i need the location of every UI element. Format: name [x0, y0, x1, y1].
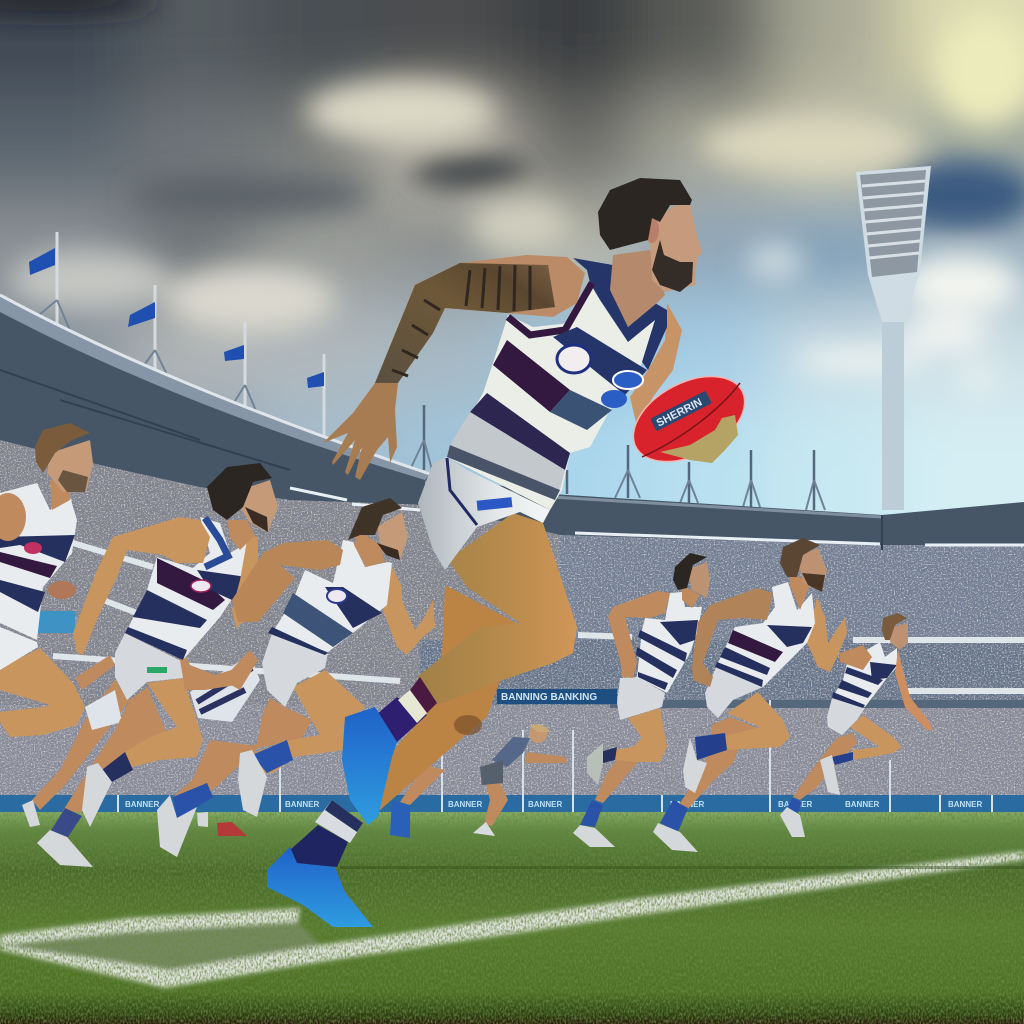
main player [267, 178, 759, 927]
main player face [650, 203, 702, 292]
main player sock maroon band [410, 677, 437, 713]
main player shorts [418, 457, 550, 570]
second runner shorts tag [147, 667, 167, 673]
far left runner beard [58, 470, 88, 492]
second runner far arm [232, 535, 258, 628]
main player maroon hoop [493, 340, 570, 412]
main player rear leg bruise [454, 715, 482, 735]
right runner three arm [840, 645, 872, 670]
perimeter advertising boards: BANNER [778, 800, 812, 809]
stadium roof [0, 295, 1024, 550]
perimeter advertising boards: BANNER [448, 800, 482, 809]
second runner lower hoops [125, 590, 207, 660]
right runner one face [687, 562, 710, 598]
right runner two arm [692, 588, 773, 687]
right runner one lower boot [573, 825, 615, 847]
main player chest hoop [553, 327, 647, 395]
third runner chest hoop [325, 587, 382, 628]
second runner raised boot [82, 763, 112, 827]
main player crest [557, 345, 591, 373]
second runner lower boot [37, 830, 93, 867]
third runner face [377, 512, 408, 560]
far left runner neck [50, 480, 70, 510]
far left runner face [47, 440, 93, 492]
second runner rear arm [180, 625, 238, 690]
far left runner hoops [0, 535, 75, 612]
right runner two jersey [717, 582, 815, 687]
football [619, 359, 759, 479]
right runner three far arm [895, 650, 933, 730]
right runner two raised sock [695, 733, 727, 760]
perimeter advertising boards: BANNER [845, 800, 879, 809]
floodlight tower [856, 166, 931, 510]
right runner two far arm [807, 597, 847, 672]
far left runner hair [35, 423, 90, 473]
main player hair [598, 178, 692, 250]
third runner hair [348, 498, 402, 540]
right runner two beard [802, 573, 825, 592]
second runner maroon hoop [157, 558, 225, 610]
right runner one hoops [636, 620, 698, 690]
third runner jersey [272, 540, 392, 652]
jersey badge two [601, 390, 627, 408]
main player shorts trim [447, 458, 477, 525]
jersey badge one [613, 371, 643, 389]
second runner beard [245, 507, 268, 532]
grass texture [0, 812, 1024, 1024]
third runner arm [232, 540, 343, 622]
right runner two thigh [722, 692, 790, 750]
main player rear band stripe [325, 800, 363, 832]
player: far left runner [0, 423, 93, 737]
right runner three hoops [832, 662, 897, 708]
main player rear sock [290, 825, 348, 867]
perimeter advertising boards: BANNER [285, 800, 319, 809]
third runner lower hoop [268, 627, 328, 655]
far left runner badge [24, 542, 42, 554]
player: second runner [37, 463, 278, 867]
background player: legs behind main runner [390, 765, 445, 838]
main player raised boot [342, 707, 397, 825]
second runner collar [205, 518, 228, 567]
third runner raised boot [238, 750, 267, 817]
right runner two lower sock [660, 800, 688, 832]
far left runner shoulder [0, 493, 26, 541]
third runner mid hoop [283, 593, 353, 647]
main player raised sock [370, 697, 427, 742]
third runner front leg [255, 670, 365, 775]
third runner lower sock [173, 783, 213, 820]
right runner one lower leg [595, 760, 638, 803]
storm clouds [0, 0, 1024, 387]
second runner neck [227, 520, 255, 550]
right runner three lower leg [793, 733, 857, 800]
right runner three raised sock [832, 752, 853, 765]
ad board banner in stand [497, 689, 617, 704]
main player upper leg [417, 513, 577, 705]
background player: striped behind second runner [188, 650, 260, 836]
perimeter advertising boards: BANNER [528, 800, 562, 809]
right runner two hoops [715, 625, 812, 687]
right runner two raised boot [683, 738, 707, 793]
right runner one arm [608, 591, 670, 678]
second runner rear leg [62, 687, 167, 812]
right runner three face [890, 623, 908, 650]
right runner three lower sock [787, 798, 802, 813]
main player lower hoop [470, 393, 570, 470]
second runner face [240, 480, 278, 532]
perimeter advertising boards: BANNER [670, 800, 704, 809]
main player waist shading [450, 412, 565, 490]
third runner far arm [383, 563, 435, 655]
right runner two lower boot [653, 823, 698, 852]
right runner three raised boot [820, 755, 840, 795]
perimeter advertising boards: BANNER [125, 800, 159, 809]
main player jersey [447, 258, 667, 510]
right runner one raised boot [587, 743, 603, 785]
third runner badge [327, 589, 347, 603]
second runner raised sock [98, 752, 133, 783]
player: right runner two [653, 538, 847, 852]
perimeter advertising boards: BANNER [948, 800, 982, 809]
third runner neck [354, 530, 385, 567]
third runner raised sock [252, 740, 293, 773]
main player rear boot [267, 847, 373, 927]
right runner three shorts [827, 698, 865, 735]
main player arm trim [508, 283, 592, 335]
right runner two neck [790, 570, 810, 610]
right runner two maroon hoop [728, 630, 783, 662]
second runner badge [191, 580, 211, 592]
right runner one raised sock [600, 747, 617, 763]
player: right runner one [573, 553, 710, 847]
third runner shorts [262, 633, 328, 707]
right runner two lower leg [677, 717, 757, 810]
player: right runner three [780, 613, 933, 837]
second runner lower sock [50, 808, 82, 837]
right runner two shorts [705, 665, 763, 718]
main player rear band [315, 800, 363, 843]
flags on the stadium roof [29, 232, 825, 510]
far left runner shorts [0, 627, 38, 670]
main player neck [610, 250, 665, 327]
far left runner maroon hoop [0, 552, 57, 578]
third runner beard [377, 543, 400, 560]
right runner one jersey [637, 592, 702, 693]
grass field [0, 812, 1024, 1024]
background player: far left [22, 655, 130, 827]
far left runner leg [0, 648, 85, 737]
pitch shadow line [340, 866, 1024, 869]
background player: distant centre [473, 724, 567, 836]
third runner lower boot [157, 795, 197, 857]
right runner one neck [682, 585, 700, 608]
white boundary line [0, 851, 1024, 988]
right runner three hair [882, 613, 907, 640]
right runner two hair [780, 538, 820, 577]
second runner shorts [115, 633, 185, 700]
perimeter advertising boards [0, 700, 1024, 812]
player: third runner [157, 498, 435, 857]
right runner one shorts [617, 677, 665, 720]
sky background [0, 0, 1024, 680]
right runner one thigh [613, 708, 667, 762]
main player arm [375, 255, 585, 383]
football: SHERRIN [655, 396, 704, 429]
second runner arm [73, 517, 210, 655]
second runner hair [207, 463, 272, 520]
second runner jersey [127, 517, 258, 660]
right runner three jersey [832, 642, 897, 707]
main player ear [645, 217, 659, 243]
right runner one lower sock [580, 800, 603, 827]
main player collar [573, 258, 667, 370]
main player hem hoop [447, 445, 560, 500]
crowd stands [0, 430, 1024, 797]
main player beard [652, 240, 693, 292]
second runner front leg [123, 678, 203, 767]
main player shorts tag [477, 497, 512, 511]
main player rear leg [368, 585, 520, 820]
right runner one hair [673, 553, 707, 590]
main player hand [323, 383, 398, 480]
ad board banner in stand: BANNING BANKING [501, 692, 597, 703]
main player sock white band [398, 690, 427, 723]
third runner rear leg [173, 698, 312, 797]
main player navy hoop [550, 390, 612, 430]
far left runner jersey [0, 483, 77, 640]
right runner two face [797, 548, 827, 592]
far left runner hand [48, 581, 76, 599]
second runner chest hoop [197, 570, 247, 600]
right runner three lower boot [780, 807, 805, 837]
main player tattoo lines [392, 265, 530, 376]
right runner three thigh [850, 715, 902, 760]
main player arm tattoo [375, 263, 555, 383]
main player far arm [630, 303, 682, 427]
